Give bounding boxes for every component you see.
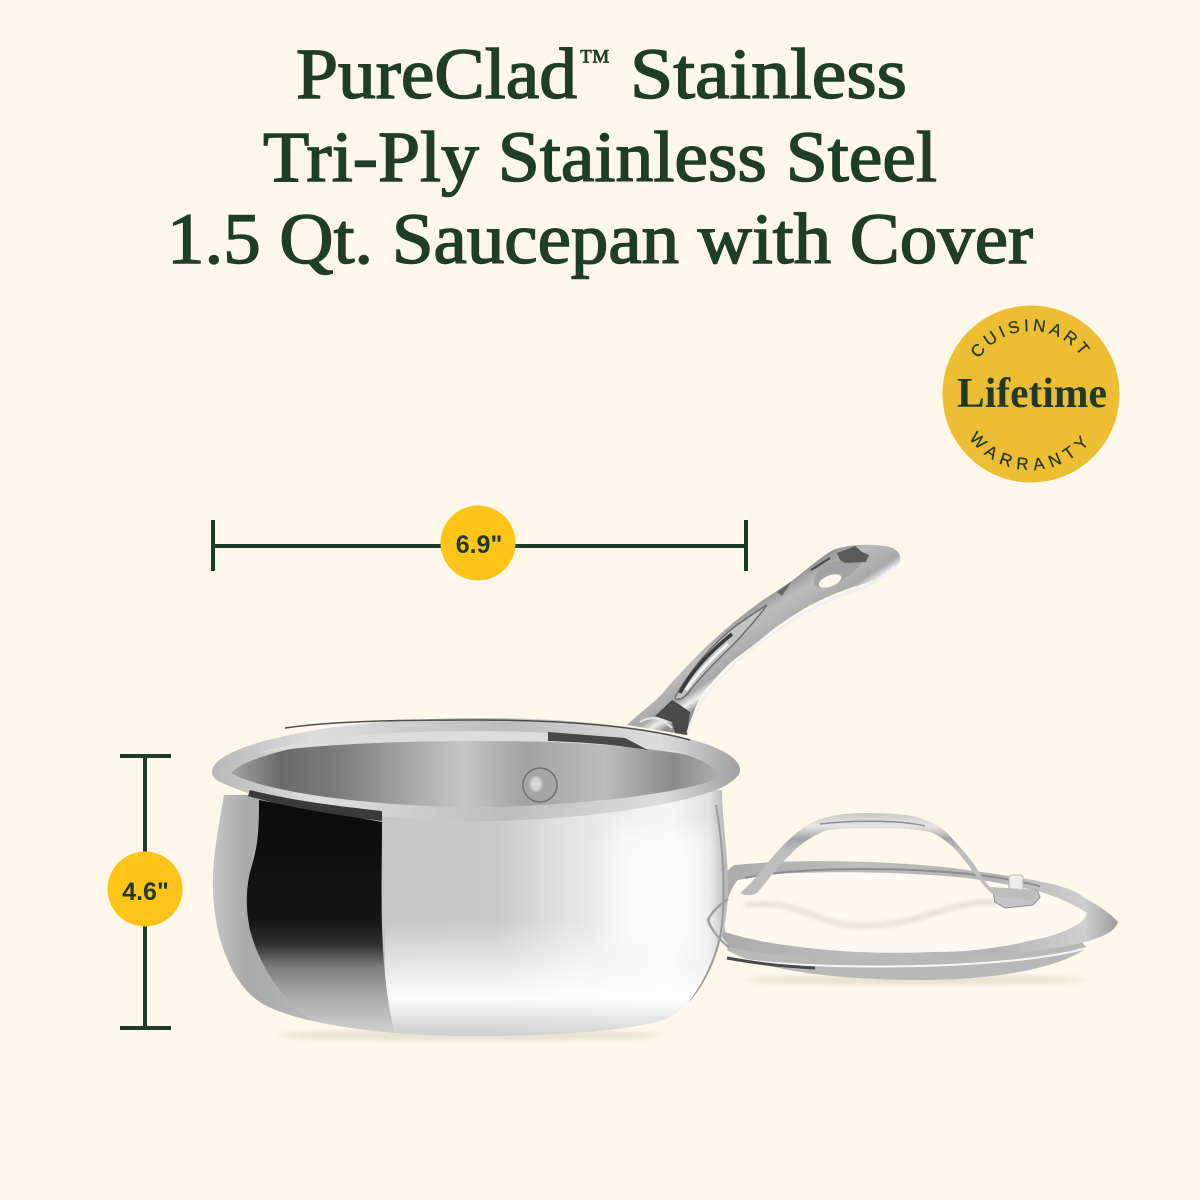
title line 3: 1.5 Qt. Saucepan with Cover [167, 199, 1033, 279]
handle dark dimple [837, 546, 869, 563]
lid edge overlapping the pan [708, 899, 730, 948]
handle small notch [777, 581, 792, 596]
width badge [440, 506, 516, 580]
badge disc [942, 306, 1120, 482]
title line 2: Tri-Ply Stainless Steel [263, 117, 937, 197]
title line 1: Stainless [630, 34, 907, 114]
height line [120, 756, 171, 1028]
width value: 6.9" [456, 531, 502, 559]
handle root shadow [655, 700, 690, 735]
pan body [213, 790, 728, 1036]
rim back dark line [285, 720, 690, 740]
inner rivet [523, 768, 557, 802]
title line 1 [296, 34, 907, 114]
interior dark wedge [548, 732, 648, 750]
lifetime warranty badge [942, 306, 1120, 482]
width dimension marker [213, 506, 746, 580]
handle hanging hole [814, 560, 862, 588]
height value: 4.6" [122, 878, 169, 906]
height badge [108, 852, 182, 926]
title line 1: PureClad [296, 34, 577, 114]
bright window reflection [610, 830, 710, 950]
interior back lip band [258, 731, 690, 755]
lid shadow [745, 975, 1085, 985]
saucepan [212, 718, 740, 1041]
dark reflection [247, 800, 395, 1036]
lid lower rim [727, 940, 1087, 980]
pan shadow [280, 1029, 660, 1041]
infographic canvas [108, 47, 1120, 1042]
handle body [627, 545, 900, 735]
handle long slot [675, 605, 767, 699]
height dimension marker [108, 756, 182, 1028]
pan body reflections [247, 800, 730, 1036]
lid glass dome reflection [745, 902, 1000, 926]
width line [213, 520, 746, 571]
badge arc text: Cuisinart: CUISINART [972, 319, 1090, 356]
lower white highlight [385, 932, 722, 1034]
lid with glass and handle [708, 813, 1118, 985]
badge arc text: Warranty: WARRANTY [970, 430, 1086, 470]
badge word: Lifetime: Lifetime [957, 371, 1107, 417]
handle bright edge [688, 566, 895, 733]
right edge band [690, 805, 724, 1002]
saucepan handle [627, 545, 900, 735]
lid handle [740, 813, 1037, 900]
lid glass [724, 872, 1087, 953]
pan interior [231, 731, 721, 807]
rim shadow strip [248, 790, 382, 821]
pan rim [212, 718, 740, 821]
lid metal rim [708, 861, 1118, 960]
lid knob rivet [993, 875, 1040, 908]
title [167, 34, 1033, 279]
title line 1: ™ [579, 42, 610, 78]
